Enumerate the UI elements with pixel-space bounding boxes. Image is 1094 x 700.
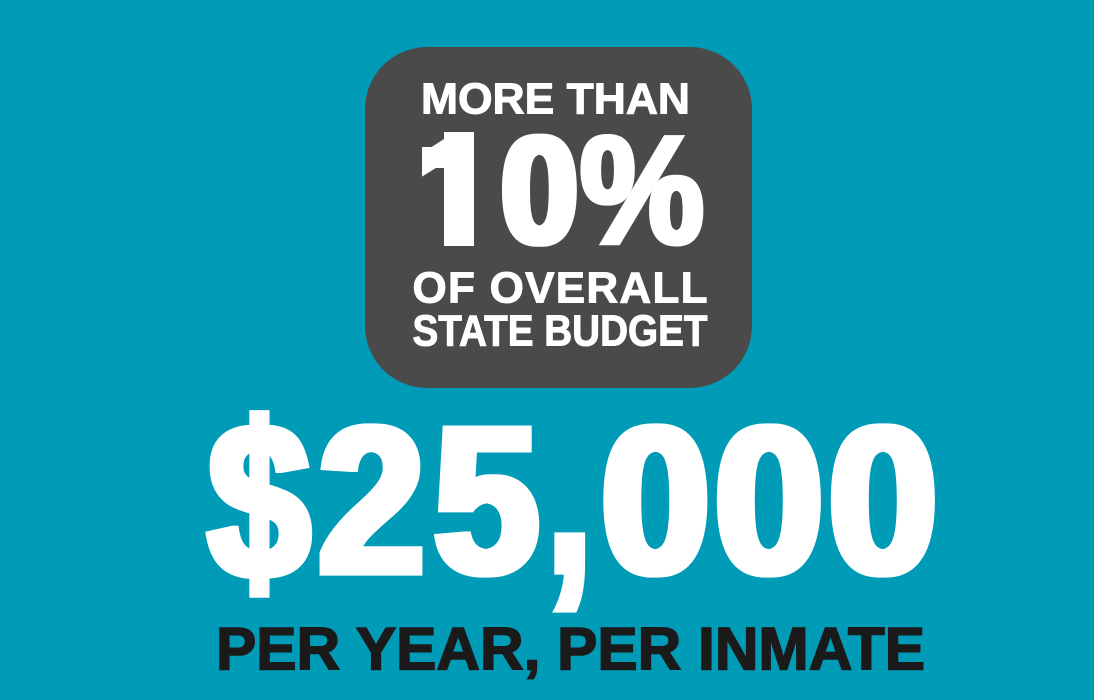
statistic: cost per inmate: 0: [715, 383, 823, 618]
statistic: cost per inmate: $: [208, 377, 310, 626]
panel: state budget share: [365, 47, 752, 388]
statistic: 10 percent: 0: [501, 104, 578, 276]
statistic: cost per inmate: 0: [829, 383, 937, 618]
text: state budget: STATE BUDGET: [412, 306, 708, 356]
statistic: cost per inmate: [208, 350, 937, 626]
statistic: 10 percent: %: [580, 104, 704, 276]
text: of overall: OF OVERALL: [412, 264, 708, 312]
caption: per year, per inmate: PER YEAR, PER INMATE: [216, 616, 925, 682]
infographic canvas: [205, 47, 935, 680]
statistic: 10 percent: [422, 132, 704, 247]
statistic: cost per inmate: 0: [601, 383, 710, 618]
statistic: 10 percent: 1: [413, 106, 497, 275]
statistic: cost per inmate: 2: [318, 383, 424, 618]
statistic: cost per inmate: ,: [548, 350, 590, 625]
statistic: cost per inmate: 5: [434, 383, 539, 618]
text: more than: MORE THAN: [421, 74, 690, 124]
